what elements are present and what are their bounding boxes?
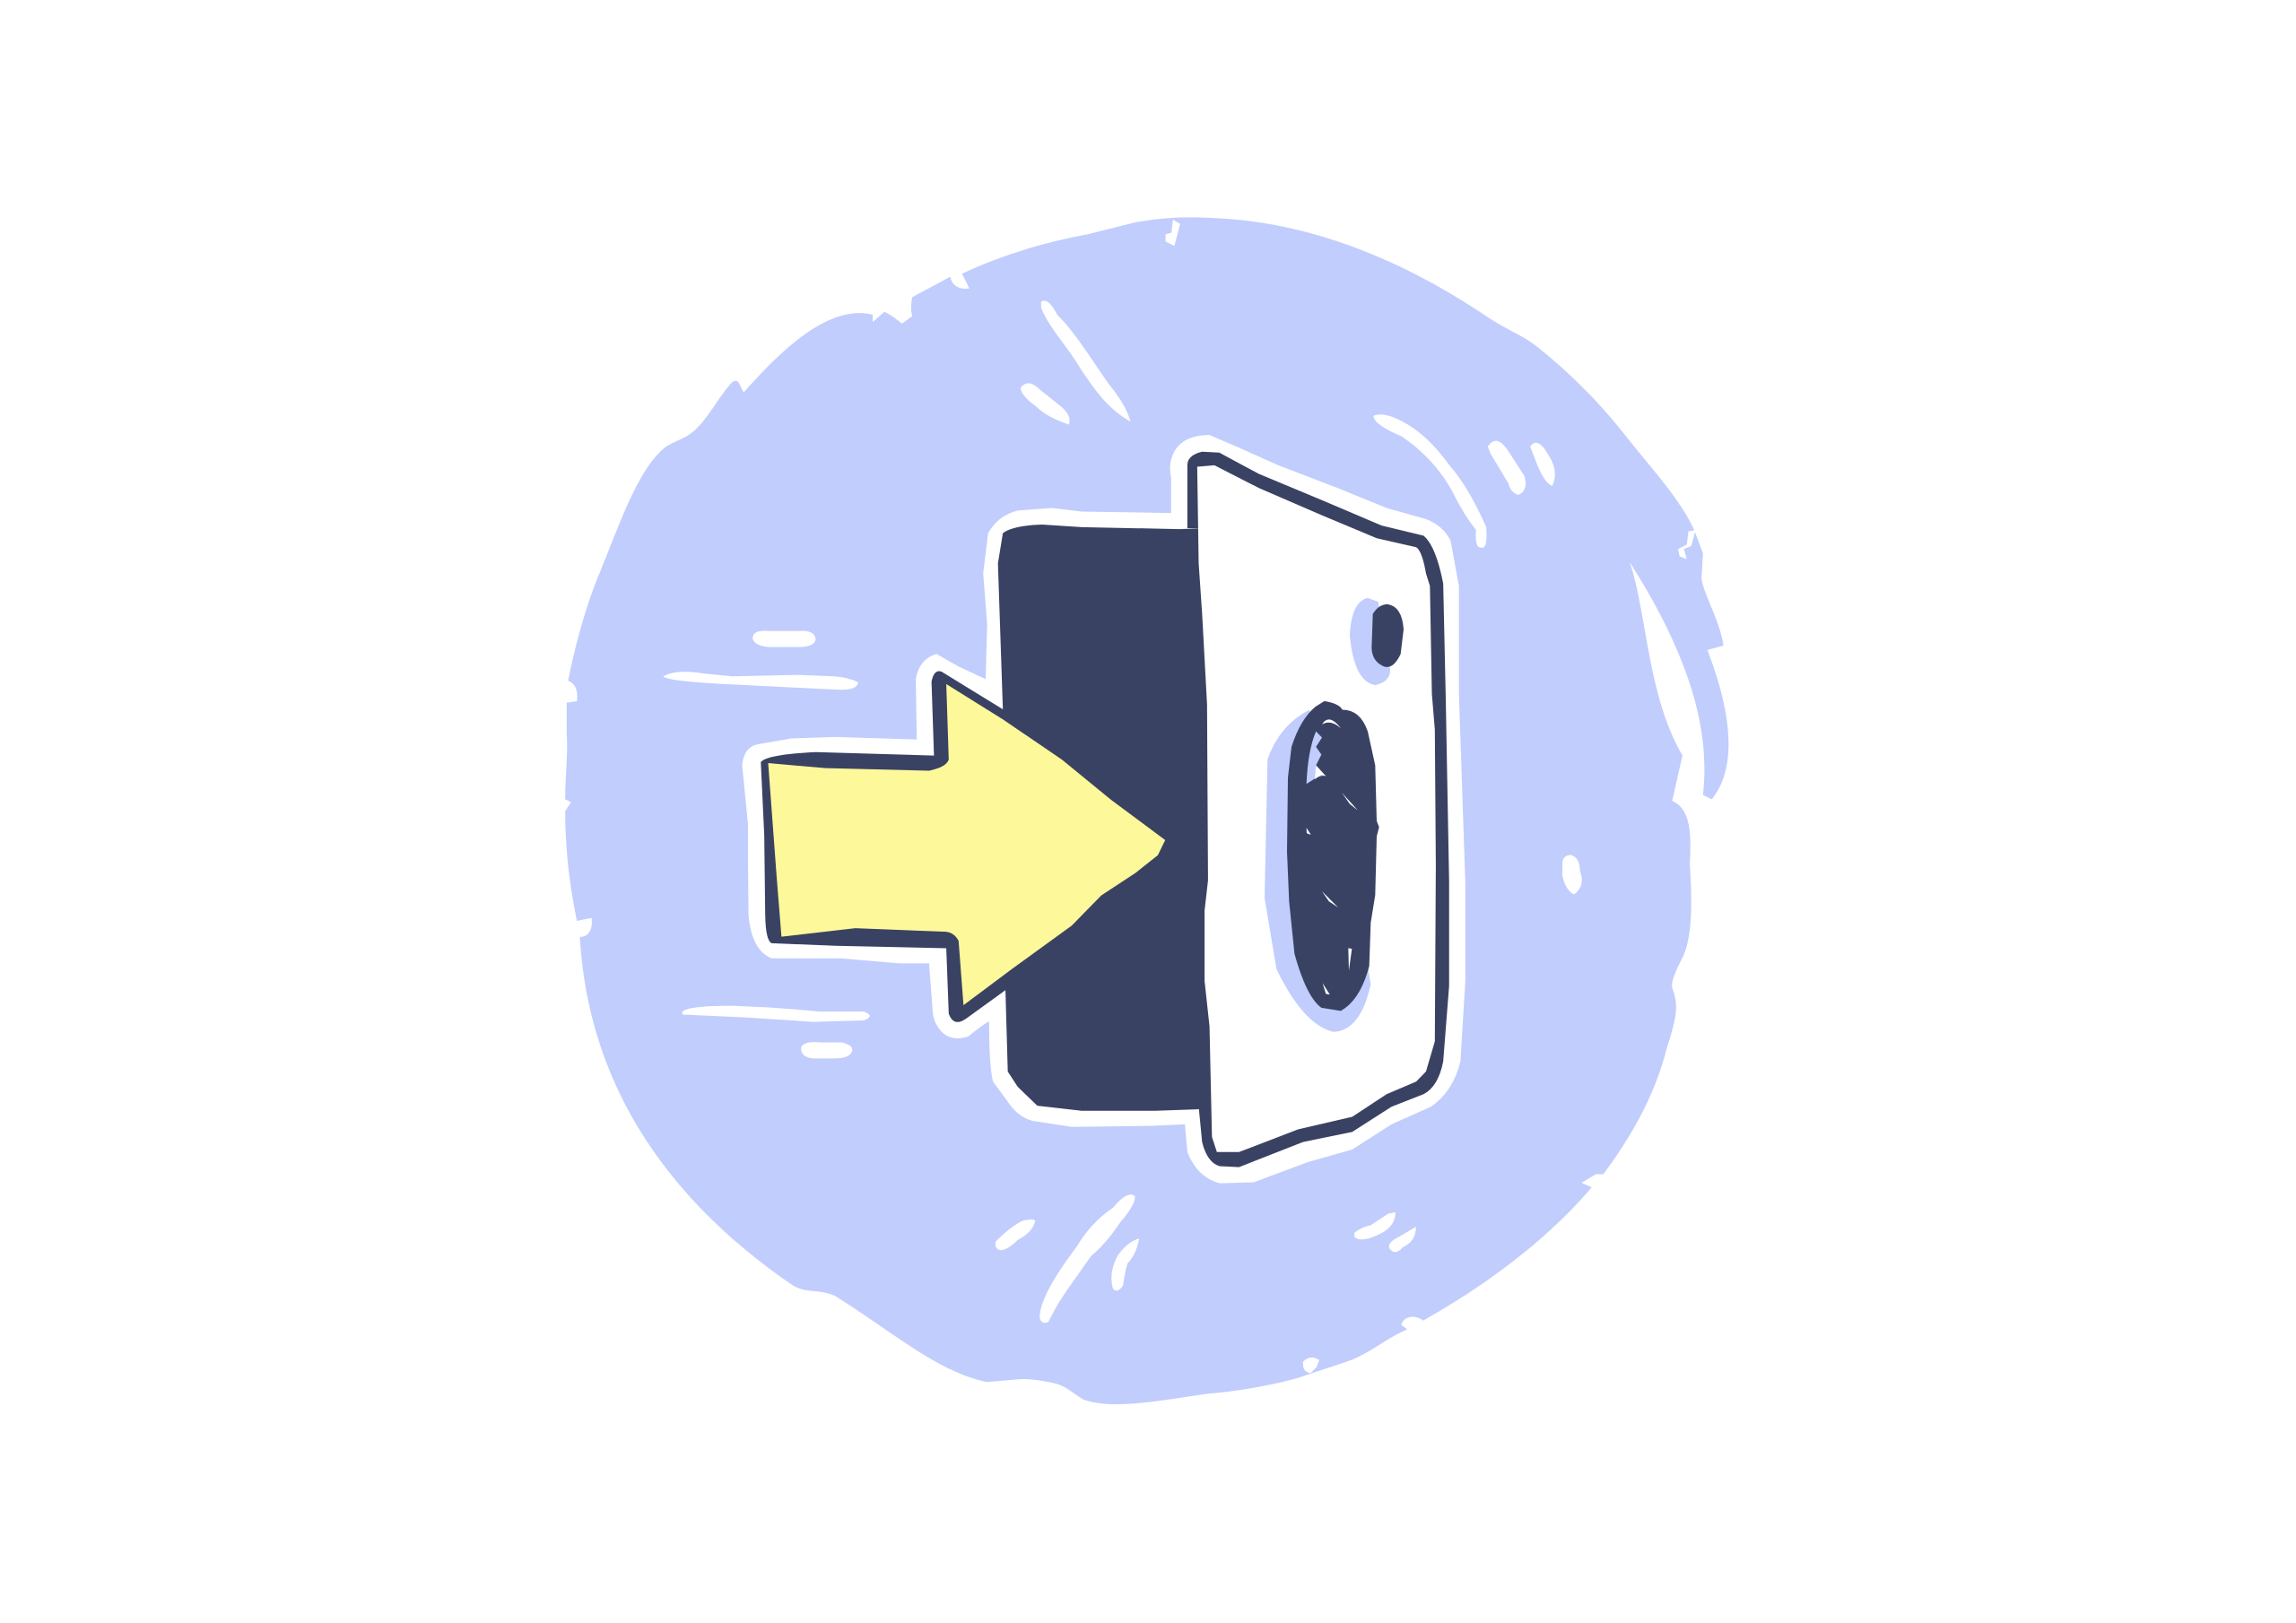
arrow outline [761, 671, 1161, 1022]
background blob [565, 217, 1728, 1404]
door frame stroke [1187, 452, 1449, 1167]
handle shadow [1265, 710, 1370, 1032]
door and arrow artwork [742, 435, 1465, 1184]
door handle and knob [1265, 598, 1404, 1032]
knob [1371, 604, 1404, 667]
arrow fill [769, 684, 1165, 1005]
handle gap [1307, 732, 1326, 784]
door leaf [1197, 465, 1436, 1152]
white outline around door and arrow [742, 435, 1465, 1184]
doorway dark panel [998, 525, 1212, 1111]
knob shadow [1350, 598, 1390, 685]
handle [1287, 701, 1379, 1011]
white brush highlights [664, 220, 1696, 1373]
handle highlights [1307, 719, 1358, 994]
